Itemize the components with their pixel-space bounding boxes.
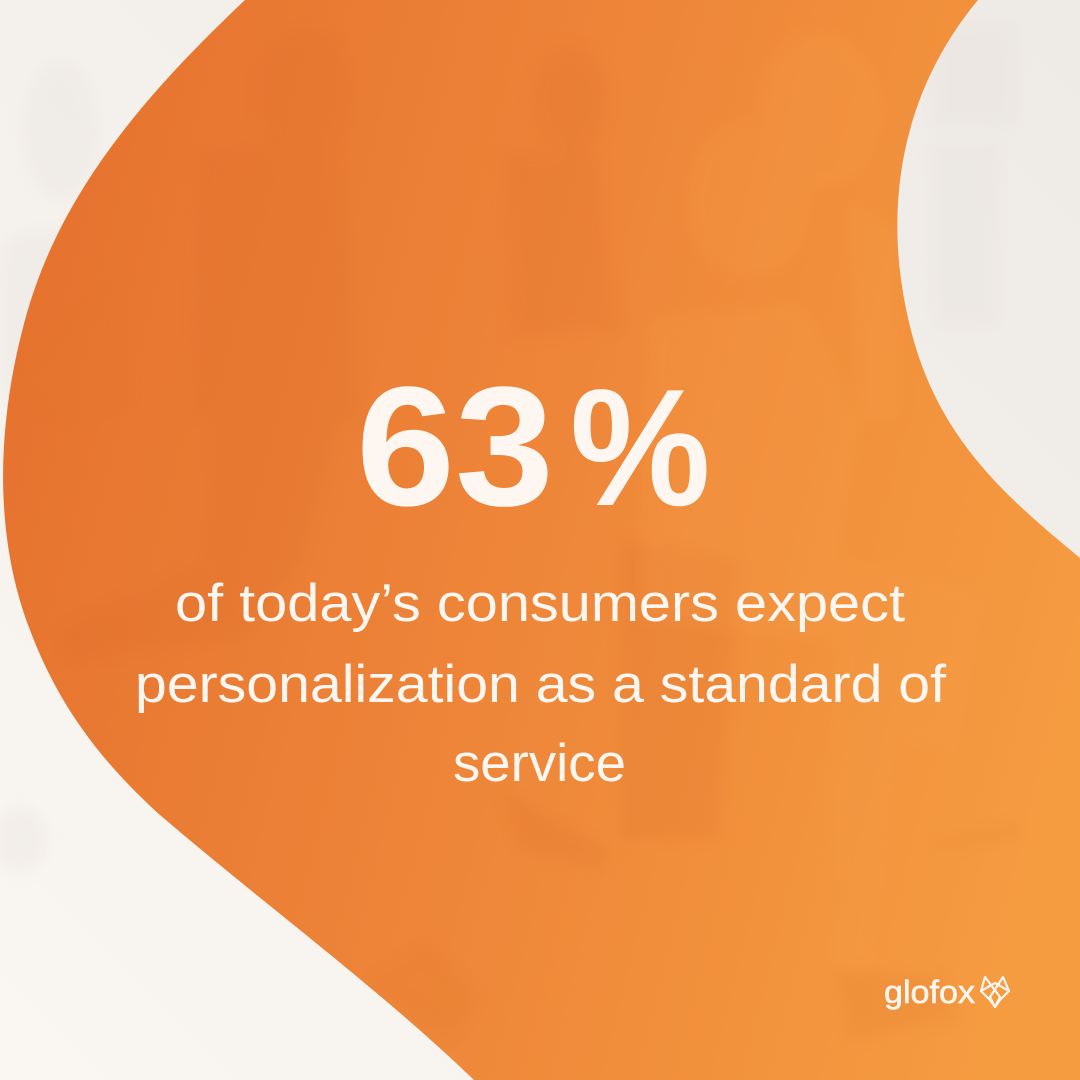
- description text: personalization as a standard of: [135, 655, 946, 714]
- logo wordmark: glofox: [884, 974, 975, 1010]
- faint photo outside the shape: [0, 20, 1020, 875]
- big statistic 63%: %: [570, 355, 711, 541]
- big statistic 63%: [356, 352, 711, 542]
- description text: [135, 574, 946, 793]
- glofox logo: [884, 974, 1009, 1010]
- icon: fox head: [981, 977, 1009, 1007]
- description text: service: [453, 734, 626, 793]
- description text: of today’s consumers expect: [175, 574, 905, 633]
- big statistic 63%: 63: [356, 352, 554, 542]
